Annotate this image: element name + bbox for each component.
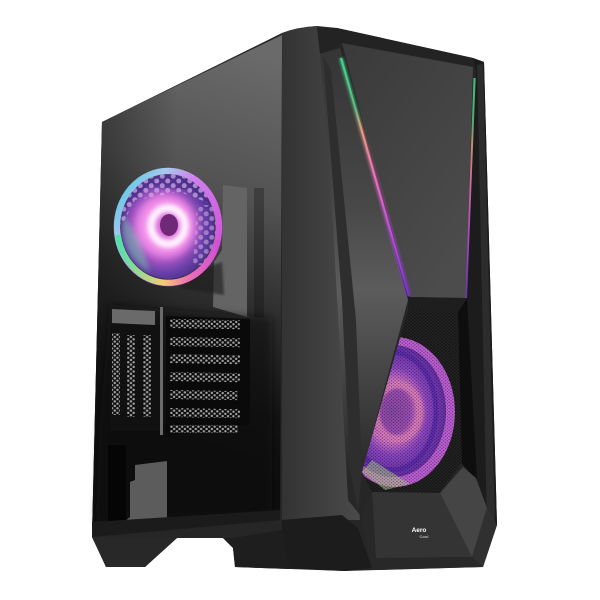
middle foot bbox=[223, 530, 290, 569]
lower right facet bbox=[440, 467, 487, 557]
right internal bar bbox=[254, 188, 264, 318]
expansion bracket highlight bbox=[112, 309, 155, 325]
left LED strip bbox=[341, 58, 409, 296]
fan hub white ring bbox=[151, 208, 185, 244]
fan ring lower glow bbox=[118, 235, 218, 283]
mesh intake bbox=[362, 310, 462, 493]
fan hub glow bbox=[145, 204, 187, 248]
central wedge bbox=[320, 48, 408, 515]
lower pillar foot bbox=[282, 515, 372, 571]
AeroCool logo: Cool bbox=[420, 534, 428, 539]
fan hub bbox=[160, 214, 178, 236]
wedge dark stripe bbox=[323, 56, 362, 510]
bottom trim bbox=[360, 492, 483, 570]
hub ring bbox=[376, 385, 420, 439]
right edge highlight bbox=[477, 64, 495, 528]
left foot bbox=[92, 537, 177, 567]
fan grille bbox=[118, 172, 222, 265]
fan ring bbox=[117, 171, 219, 283]
mesh right dark frame bbox=[458, 298, 477, 480]
PSU bay shadow bbox=[108, 445, 126, 522]
illustration: PC tower case bbox=[90, 26, 497, 571]
front RGB fan bbox=[362, 310, 462, 493]
AeroCool logo bbox=[412, 527, 428, 539]
side glass panel bbox=[92, 35, 282, 536]
front left pillar bbox=[282, 26, 360, 520]
motherboard tray plate bbox=[213, 185, 247, 317]
upper front panel bbox=[342, 43, 473, 298]
top bevel bbox=[317, 28, 476, 70]
fan body bbox=[364, 345, 446, 477]
power supply cutout bbox=[124, 461, 167, 522]
case silhouette bbox=[92, 26, 497, 571]
vent rows bbox=[166, 316, 250, 436]
panel bottom ledge bbox=[408, 297, 466, 312]
lower right outer bbox=[472, 508, 497, 567]
right LED strip bbox=[467, 78, 475, 298]
rear fan reflection shadow bbox=[180, 262, 224, 295]
bottom of side panel strip bbox=[92, 510, 280, 537]
inner ring bbox=[365, 350, 438, 472]
fan outer glow ring bbox=[362, 337, 455, 487]
mesh overlay bbox=[362, 310, 462, 493]
rear RGB fan bbox=[117, 171, 222, 283]
AeroCool logo: Aero bbox=[412, 527, 426, 534]
lower internal dark area bbox=[96, 305, 272, 522]
fan body bbox=[121, 175, 215, 279]
green left tint bbox=[123, 215, 150, 272]
right side strip bbox=[462, 58, 497, 530]
lower green tint bbox=[362, 460, 410, 490]
bottom front panel bbox=[372, 492, 472, 558]
rear expansion slot covers bbox=[110, 307, 163, 435]
